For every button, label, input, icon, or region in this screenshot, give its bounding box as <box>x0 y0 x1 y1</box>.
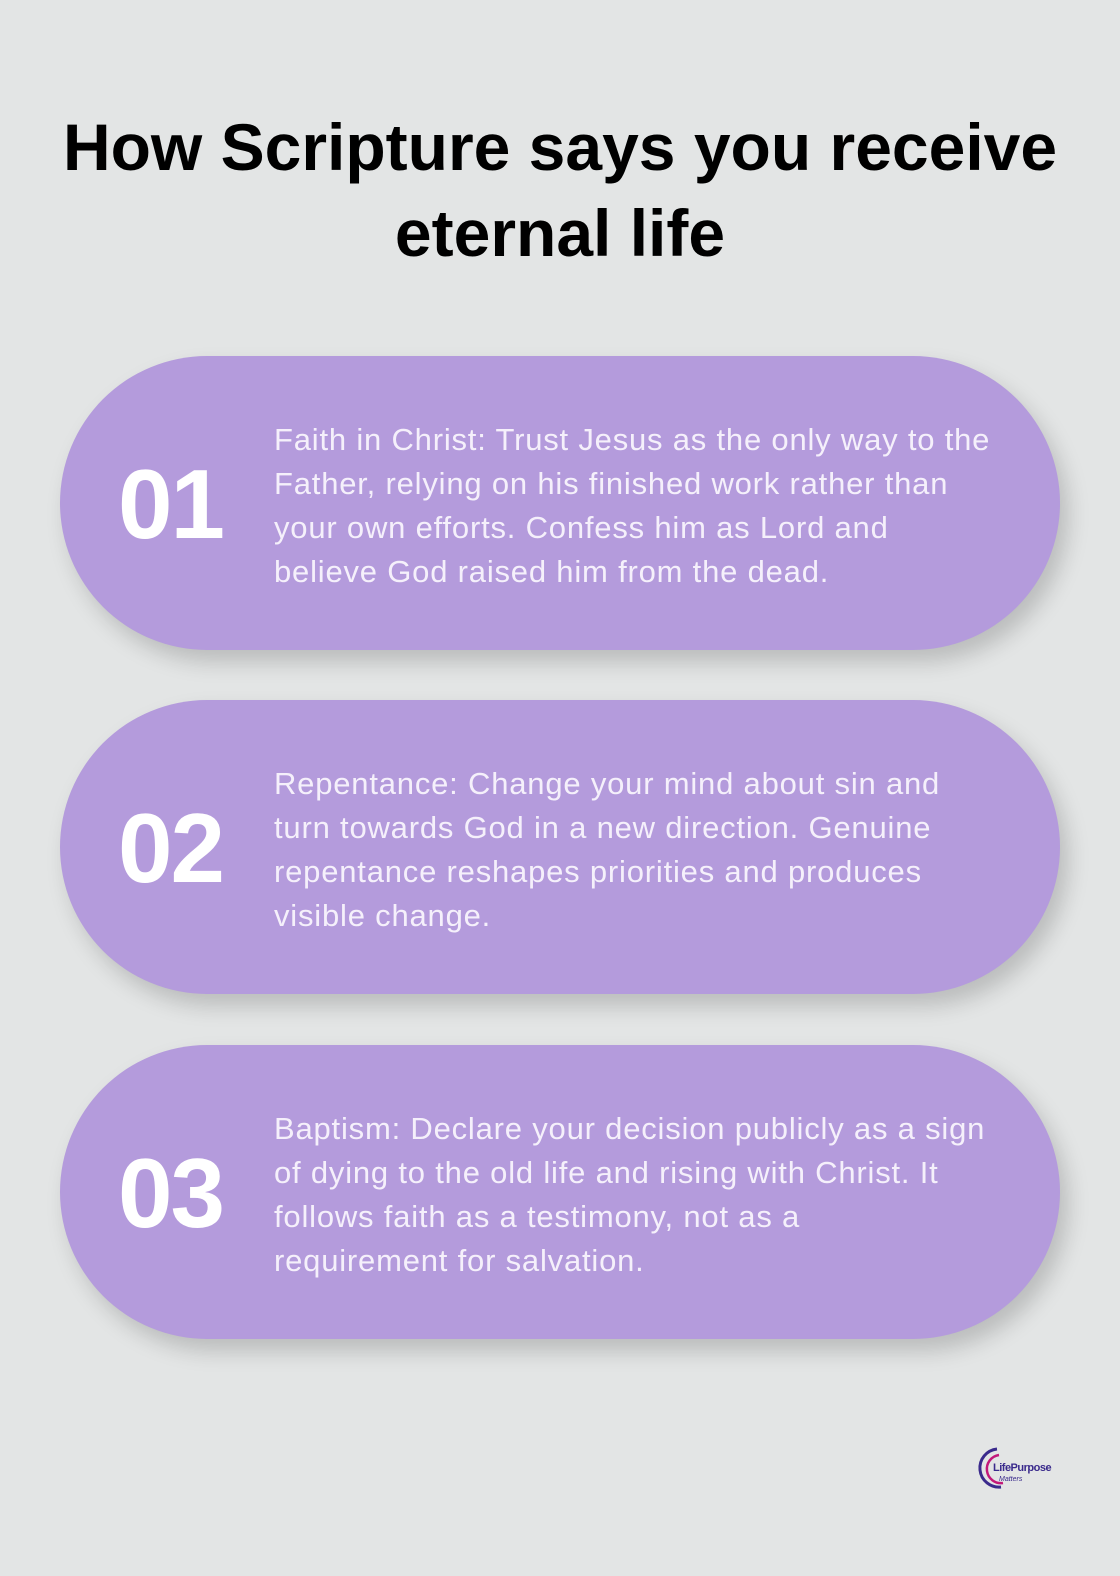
text: repentance: turn towards God in a new direction. Genuine <box>274 810 931 845</box>
text: baptism: of dying to the old life and rising with Christ. It <box>274 1155 939 1190</box>
text: baptism <box>274 1111 985 1278</box>
text: faith: believe God raised him from the dead. <box>274 554 829 589</box>
text: repentance: Repentance: Change your mind about sin and <box>274 766 940 801</box>
text: baptism: requirement for salvation. <box>274 1243 645 1278</box>
text: repentance: repentance reshapes priorities and produces <box>274 854 922 889</box>
text: baptism: Baptism: Declare your decision publicly as a sign <box>274 1111 985 1146</box>
panel: step 01 <box>60 356 1060 650</box>
text: repentance: visible change. <box>274 898 491 933</box>
number 03: 03 <box>118 1138 223 1248</box>
panel: step 02 <box>60 700 1060 994</box>
text: faith: Faith in Christ: Trust Jesus as the only way to the <box>274 422 990 457</box>
text: baptism: follows faith as a testimony, not as a <box>274 1199 800 1234</box>
text: repentance <box>274 766 940 933</box>
logo: LifePurpose <box>993 1462 1051 1474</box>
text: faith: Father, relying on his finished work rather than <box>274 466 948 501</box>
number 01: 01 <box>118 449 223 559</box>
title <box>63 110 1057 270</box>
logo: Matters <box>999 1476 1023 1483</box>
title: eternal life <box>395 196 725 270</box>
logo <box>978 1448 1052 1489</box>
number 02: 02 <box>118 793 223 903</box>
title: How Scripture says you receive <box>63 110 1057 184</box>
panel: step 03 <box>60 1045 1060 1339</box>
text: faith <box>274 422 990 589</box>
text: faith: your own efforts. Confess him as Lord and <box>274 510 889 545</box>
